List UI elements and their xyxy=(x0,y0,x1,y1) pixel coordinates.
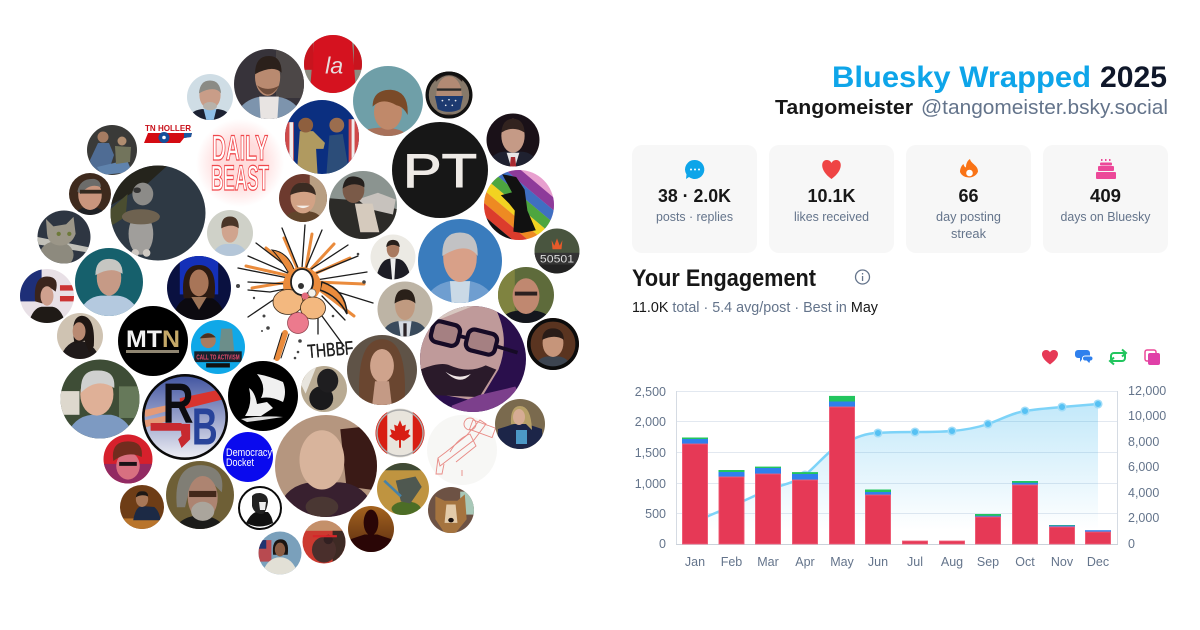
avatar: young man gingham shirt xyxy=(207,210,253,256)
icon: legend quotes xyxy=(1145,350,1160,365)
cumulative line xyxy=(695,404,1098,522)
avatar: red t-shirt logo xyxy=(304,35,362,93)
left axis labels: 1,000 xyxy=(635,477,666,491)
avatar: red line sketch xyxy=(427,415,497,485)
panel: days on Bluesky xyxy=(1043,145,1168,253)
avatar: man at hearing xyxy=(120,485,164,529)
month labels: May xyxy=(830,555,855,569)
avatar: man in blue blazer xyxy=(234,49,304,119)
cumulative area xyxy=(695,404,1098,544)
avatar: RB logo: R xyxy=(163,373,194,436)
avatar: Lincoln engraving xyxy=(239,487,281,529)
right axis labels: 4,000 xyxy=(1128,486,1159,500)
panel: day posting streak xyxy=(906,145,1031,253)
month labels xyxy=(685,555,1109,569)
avatar: man in suit dark background xyxy=(486,114,540,166)
avatar: PT logo: PT xyxy=(403,144,477,197)
avatar: Democracy Docket logo: Docket xyxy=(226,457,254,469)
avatar: bald man with glasses xyxy=(498,267,554,323)
title: 2025 xyxy=(1100,61,1167,94)
avatar bubble cluster xyxy=(20,35,585,574)
icon: legend heart xyxy=(1042,350,1058,364)
panel: days on Bluesky: days on Bluesky xyxy=(1060,209,1151,224)
right axis labels: 10,000 xyxy=(1128,409,1166,423)
avatar: man in suit and tie xyxy=(378,282,432,336)
avatar: PT logo xyxy=(392,122,488,218)
avatar: RB logo xyxy=(142,373,228,460)
avatar: Democracy Docket logo xyxy=(223,432,273,482)
month labels: Feb xyxy=(721,555,742,569)
icon: flame xyxy=(960,159,978,178)
heading: your engagement: Your Engagement xyxy=(632,265,816,292)
month labels: Aug xyxy=(941,555,963,569)
avatar: smiling man on blue xyxy=(418,219,502,303)
avatar: TN Holler logo: TN HOLLER xyxy=(145,123,191,133)
avatar: man reclining in jacket xyxy=(329,171,397,239)
avatar: man with friends on plane xyxy=(87,125,137,175)
avatar: Canadian flag button xyxy=(376,408,424,458)
month labels: Mar xyxy=(757,555,779,569)
avatar: red hair sunglasses xyxy=(104,434,152,484)
icon: cartoon ears xyxy=(272,250,347,314)
engagement summary: 11.0K total · 5.4 avg/post · Best in May xyxy=(632,300,879,316)
panel: days on Bluesky: 409 xyxy=(1090,186,1121,206)
avatar: George Takei xyxy=(60,360,140,438)
cumulative points xyxy=(801,400,1102,479)
right axis labels xyxy=(1128,384,1166,551)
avatar: man black suit light background xyxy=(370,234,416,280)
avatar: cartoon cat with spiky hair: THBBF xyxy=(307,338,354,363)
panel: likes received: 10.1K xyxy=(808,186,856,206)
month labels: Jun xyxy=(868,555,888,569)
left axis labels: 0 xyxy=(659,537,666,551)
avatar: woman dark hair xyxy=(57,313,103,359)
avatar: fluffy tan dog xyxy=(428,487,474,533)
avatar: call to activism xyxy=(191,320,245,374)
avatar: call to activism: CALL TO ACTIVISM xyxy=(196,354,240,361)
user name and handle xyxy=(775,97,1168,119)
avatar: MTN logo xyxy=(118,306,188,376)
avatar: woman with long hair xyxy=(347,335,417,405)
avatar: cartoon cat with spiky hair xyxy=(236,225,373,363)
avatar: Daily Beast neon logo: BEAST xyxy=(211,159,269,198)
avatar: Daily Beast neon logo: DAILY xyxy=(212,129,268,168)
avatar: grey-haired man with round glasses xyxy=(166,461,234,529)
avatar: older man with white hair xyxy=(187,74,233,120)
avatar: blond man teal background xyxy=(353,66,423,136)
month labels: Dec xyxy=(1087,555,1109,569)
left axis labels: 2,000 xyxy=(635,415,666,429)
right axis labels: 12,000 xyxy=(1128,384,1166,398)
month labels: Apr xyxy=(795,555,815,569)
avatar: woman in dark sweater xyxy=(495,399,545,449)
avatar: man with star mask xyxy=(426,72,472,118)
left axis labels xyxy=(635,385,666,551)
icon: legend reposts xyxy=(1110,350,1126,364)
right axis labels: 8,000 xyxy=(1128,435,1159,449)
panel: day posting streak: day posting xyxy=(936,209,1001,224)
avatar: MTN logo: MTN xyxy=(126,326,180,353)
avatar: grey-haired man teal wall xyxy=(75,248,143,316)
panel: posts and replies: posts · replies xyxy=(656,209,733,224)
avatar: Daily Beast neon logo xyxy=(196,119,284,207)
left axis labels: 500 xyxy=(645,507,666,521)
icon: speech bubble xyxy=(685,160,704,179)
avatar: man dark circle frame xyxy=(527,318,579,370)
avatar: Democracy Docket logo: Democracy xyxy=(226,447,272,459)
avatar: default silhouette xyxy=(348,506,394,552)
chart legend icons xyxy=(1042,350,1160,365)
user name and handle: @tangomeister.bsky.social xyxy=(921,97,1168,119)
avatar: woman before US flag xyxy=(20,269,74,323)
avatar: rat with red glasses xyxy=(302,520,346,564)
avatar: woman with flag xyxy=(258,532,302,574)
panel: likes received: likes received xyxy=(794,209,869,224)
title: Bluesky Wrapped xyxy=(832,61,1091,94)
month labels: Oct xyxy=(1015,555,1035,569)
avatar: TN Holler logo xyxy=(144,123,192,143)
month labels: Sep xyxy=(977,555,999,569)
avatar: handshake in front of flag xyxy=(285,100,359,174)
avatar: man with glasses laughing xyxy=(69,173,111,215)
avatar: large man with glasses, purple tint xyxy=(420,306,526,412)
left axis labels: 2,500 xyxy=(635,385,666,399)
avatar: 50501 sign: 50501 xyxy=(540,254,574,266)
user name and handle: Tangomeister xyxy=(775,97,913,119)
stacked bars xyxy=(682,396,1111,544)
month labels: Nov xyxy=(1051,555,1074,569)
avatar: bald man with microphone xyxy=(275,415,377,517)
panel: day posting streak: 66 xyxy=(958,186,979,206)
month labels: Jul xyxy=(907,555,923,569)
avatar: painted miniature xyxy=(377,463,429,516)
icon: info xyxy=(856,270,870,284)
avatar: Kamala on blue stage xyxy=(167,256,231,320)
right axis labels: 0 xyxy=(1128,537,1135,551)
avatar: RB logo: B xyxy=(192,398,218,456)
avatar: small dog in leopard scarf xyxy=(110,166,206,260)
panel: posts and replies: 38 · 2.0K xyxy=(658,186,731,206)
avatar: black dog xyxy=(301,366,347,412)
avatar: 50501 sign xyxy=(534,228,580,274)
panel: day posting streak: streak xyxy=(951,226,986,241)
left axis labels: 1,500 xyxy=(635,446,666,460)
right axis labels: 2,000 xyxy=(1128,511,1159,525)
panel: posts and replies xyxy=(632,145,757,253)
right axis labels: 6,000 xyxy=(1128,460,1159,474)
avatar: red t-shirt logo: la xyxy=(325,52,343,78)
panel: likes received xyxy=(769,145,894,253)
month labels: Jan xyxy=(685,555,705,569)
avatar: white ship on black xyxy=(228,361,298,431)
avatar: rainbow stripes with silhouette xyxy=(484,170,554,240)
avatar: grey cat xyxy=(38,210,90,269)
icon: birthday cake xyxy=(1096,159,1116,179)
avatar: smiling man with dark hair xyxy=(279,174,327,222)
icon: heart xyxy=(822,160,841,179)
icon: legend replies xyxy=(1075,350,1093,364)
chart: monthly engagement stacked bars and cumulative line xyxy=(635,384,1166,569)
